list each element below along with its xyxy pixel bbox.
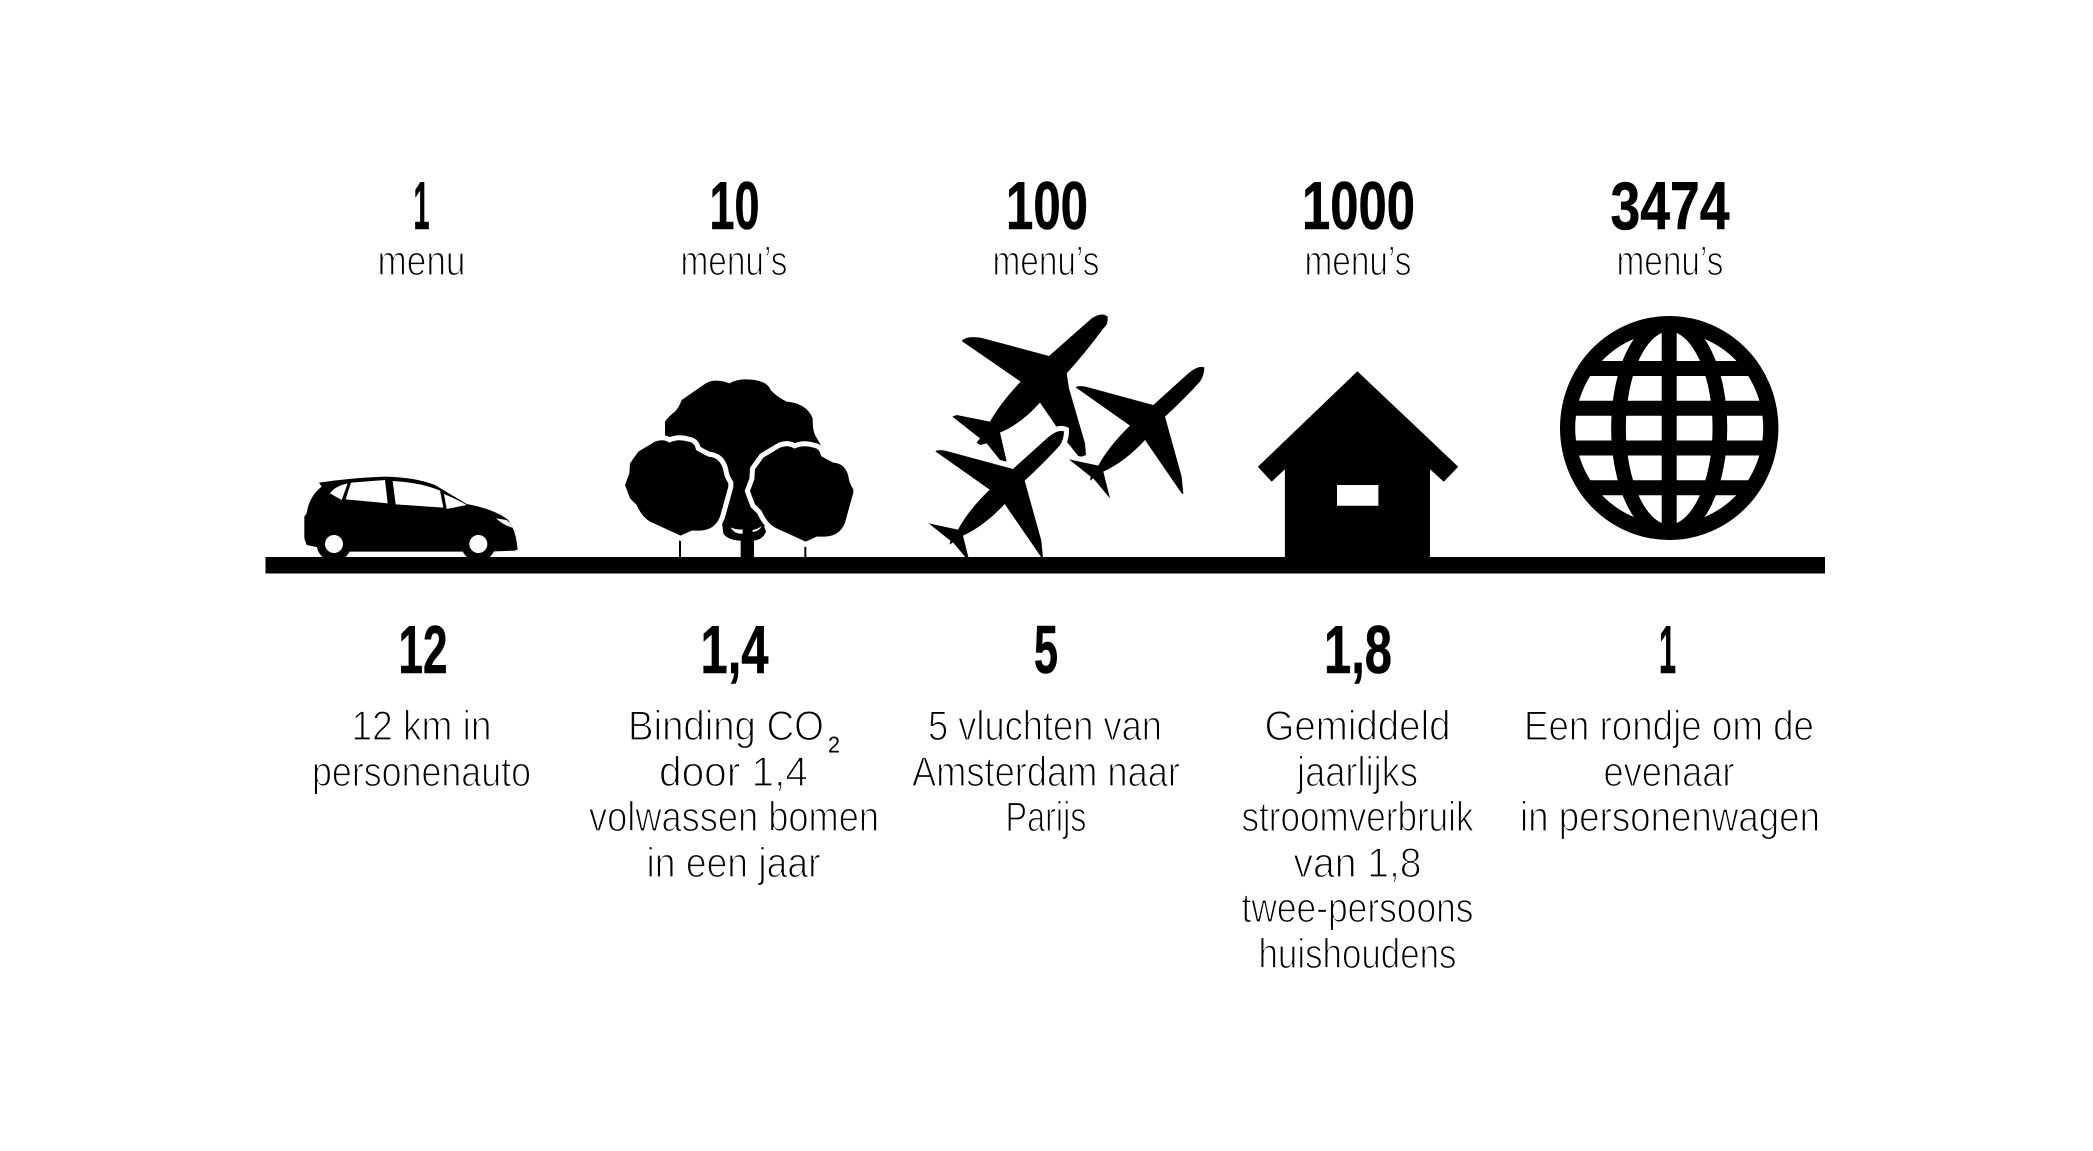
heading: 3474 menu's: 3474 bbox=[1610, 168, 1730, 244]
column: 100 menu's bbox=[912, 168, 1204, 840]
column: 3474 menu's: 1 bbox=[1659, 612, 1676, 688]
description: 5 vluchten bbox=[912, 702, 1180, 840]
column: 10 menu's bbox=[589, 168, 879, 886]
column: 1 menu bbox=[304, 168, 531, 795]
heading: 100 menu's: menu’s bbox=[992, 237, 1100, 284]
description: binding CO2: door 1,4 bbox=[659, 748, 808, 795]
ground line bbox=[266, 557, 1825, 574]
description: 5 vluchten: 5 vluchten van bbox=[928, 702, 1162, 749]
description: stroomverbruik bbox=[1242, 702, 1474, 977]
description: binding CO2: volwassen bomen bbox=[589, 793, 879, 840]
description: rondje evenaar bbox=[1520, 702, 1820, 840]
description: binding CO2: in een jaar bbox=[646, 839, 821, 886]
description: binding CO2 bbox=[589, 702, 879, 886]
heading: 1000 menu's: 1000 bbox=[1302, 168, 1415, 244]
heading: 3474 menu's bbox=[1610, 168, 1730, 284]
description: 12 km in personenauto: 12 km in bbox=[352, 702, 492, 749]
icon: airplanes bbox=[929, 315, 1204, 562]
icon: trees bbox=[625, 379, 853, 557]
heading: 1 menu: 1 bbox=[414, 168, 430, 244]
description: rondje evenaar: Een rondje om de bbox=[1524, 702, 1814, 749]
heading: 1 menu: menu bbox=[378, 237, 466, 284]
heading: 3474 menu's: menu’s bbox=[1616, 237, 1724, 284]
icon: globe bbox=[1560, 316, 1780, 540]
column: 3474 menu's bbox=[1520, 168, 1820, 840]
description: rondje evenaar: evenaar bbox=[1604, 748, 1735, 795]
value: 12: 12 bbox=[398, 612, 448, 688]
description: 12 km in personenauto: personenauto bbox=[312, 748, 531, 795]
description: stroomverbruik: huishoudens bbox=[1258, 930, 1456, 977]
heading: 10 menu's: menu’s bbox=[680, 237, 788, 284]
heading: 10 menu's bbox=[680, 168, 788, 284]
description: stroomverbruik: jaarlijks bbox=[1295, 748, 1418, 795]
heading: 1000 menu's: menu’s bbox=[1304, 237, 1412, 284]
description: 12 km in personenauto bbox=[312, 702, 531, 795]
heading: 100 menu's bbox=[992, 168, 1100, 284]
description: stroomverbruik: twee-persoons bbox=[1242, 884, 1474, 931]
description: stroomverbruik: van 1,8 bbox=[1294, 839, 1422, 886]
heading: 10 menu's: 10 bbox=[710, 168, 760, 244]
description: 5 vluchten: Parijs bbox=[1006, 793, 1086, 840]
value: 1,4: 1,4 bbox=[700, 612, 769, 688]
value: 5: 5 bbox=[1034, 612, 1058, 688]
icon: house bbox=[1258, 371, 1458, 557]
column: 1000 menu's bbox=[1242, 168, 1474, 977]
description: rondje evenaar: in personenwagen bbox=[1520, 793, 1820, 840]
description: binding CO2: Binding CO bbox=[628, 702, 824, 749]
description: binding CO2: 2 bbox=[828, 732, 840, 758]
value: 1,8: 1,8 bbox=[1324, 612, 1392, 688]
heading: 100 menu's: 100 bbox=[1006, 168, 1088, 244]
description: 5 vluchten: Amsterdam naar bbox=[912, 748, 1180, 795]
description: stroomverbruik: Gemiddeld bbox=[1264, 702, 1450, 749]
heading: 1 menu bbox=[378, 168, 466, 284]
description: stroomverbruik: stroomverbruik bbox=[1242, 793, 1474, 840]
icon: car bbox=[304, 477, 518, 561]
heading: 1000 menu's bbox=[1302, 168, 1415, 284]
infographic: carbon equivalents of menus bbox=[266, 181, 1825, 968]
